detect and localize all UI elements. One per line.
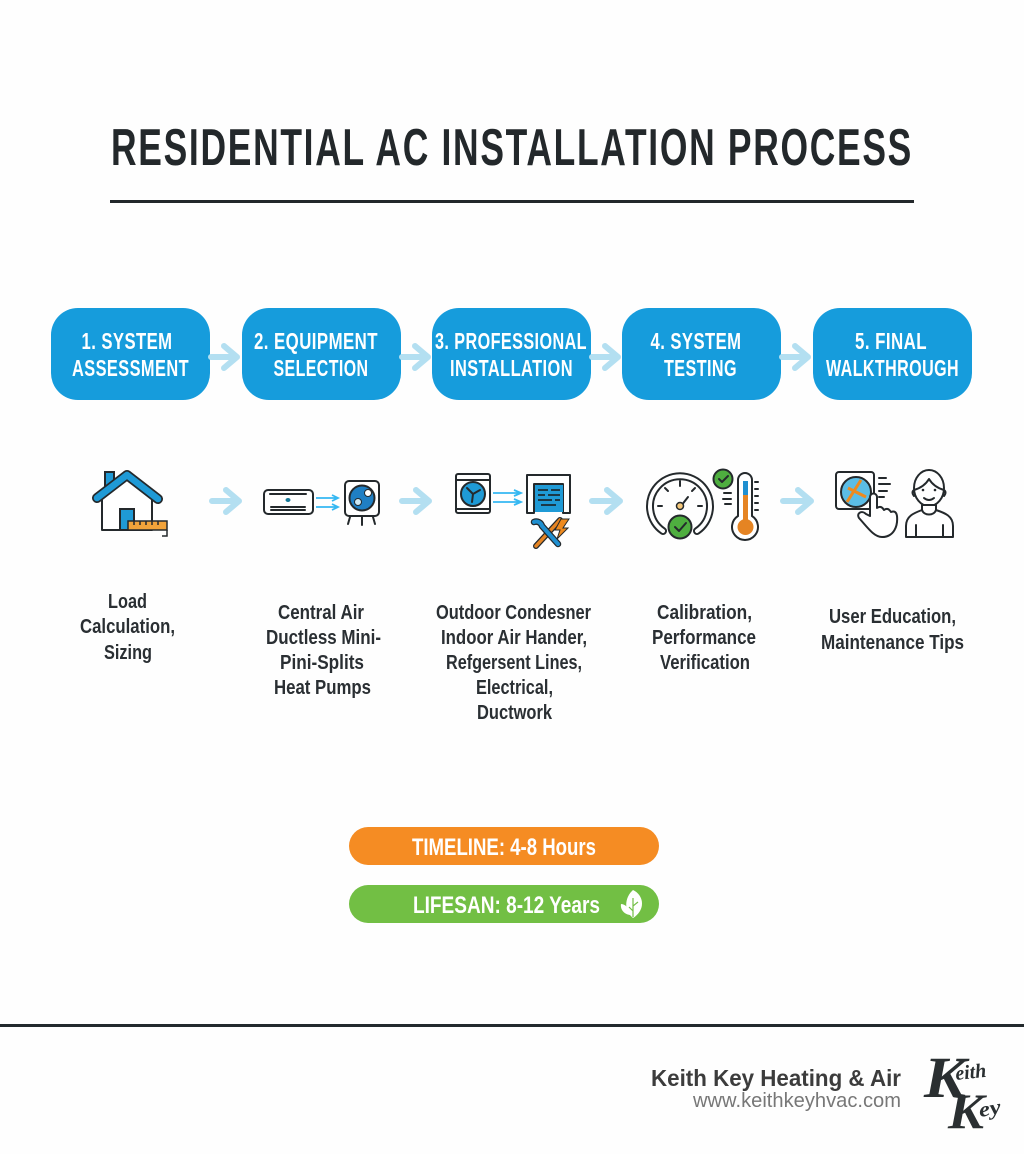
step 4 box: system testing: 4. SYSTEM xyxy=(650,328,742,354)
step 5 box: final walkthrough: WALKTHROUGH xyxy=(826,355,959,381)
step 4 box: system testing: TESTING xyxy=(664,355,737,381)
arrow: icon 2 to icon 3 xyxy=(402,490,429,512)
lifespan pill xyxy=(349,885,659,923)
step 3 box: professional installation xyxy=(432,308,591,400)
step 5 box: final walkthrough xyxy=(813,308,972,400)
text block: installation components xyxy=(436,602,591,724)
arrow: step 1 to step 2 xyxy=(211,346,237,368)
step 2 box: equipment selection: 2. EQUIPMENT xyxy=(254,328,378,354)
arrow: step 4 to step 5 xyxy=(782,346,808,368)
logo: Keith Key signature: ey xyxy=(977,1094,1003,1122)
logo: Keith Key signature: K xyxy=(923,1045,970,1110)
text block: user education xyxy=(821,606,964,654)
text block: load calculation: Sizing xyxy=(104,642,152,664)
text block: calibration and verification: Verification xyxy=(660,652,750,674)
step 5 box: final walkthrough: 5. FINAL xyxy=(855,328,927,354)
text block: calibration and verification: Calibration, xyxy=(657,602,752,624)
icon: leaf xyxy=(621,890,642,918)
text block: calibration and verification xyxy=(652,602,756,674)
text block: load calculation xyxy=(80,591,175,664)
text block: installation components: Refgersent Lines, xyxy=(446,652,582,674)
step 1 box: system assessment: ASSESSMENT xyxy=(72,355,189,381)
step 1 box: system assessment: 1. SYSTEM xyxy=(82,328,172,354)
timeline pill: TIMELINE: 4-8 Hours xyxy=(412,834,596,861)
text block: equipment options: Central Air xyxy=(278,602,364,624)
text block: installation components: Outdoor Condesner xyxy=(436,602,591,624)
text block: equipment options xyxy=(266,602,381,699)
step 3 box: professional installation: INSTALLATION xyxy=(450,355,573,381)
arrow: icon 1 to icon 2 xyxy=(212,490,239,512)
footer company name: Keith Key Heating & Air xyxy=(651,1065,901,1091)
text block: load calculation: Load xyxy=(108,591,147,613)
text block: equipment options: Heat Pumps xyxy=(274,677,371,699)
lifespan pill: LIFESAN: 8-12 Years xyxy=(413,892,600,919)
step 1 box: system assessment xyxy=(51,308,210,400)
arrow: icon 3 to icon 4 xyxy=(592,490,620,512)
text block: equipment options: Pini-Splits xyxy=(280,652,364,674)
logo: Keith Key signature: eith xyxy=(954,1060,987,1085)
text block: installation components: Ductwork xyxy=(477,702,553,724)
text block: installation components: Indoor Air Hander, xyxy=(441,627,587,649)
icon: gauge and thermometer with checks xyxy=(650,470,758,540)
text block: user education: User Education, xyxy=(829,606,956,628)
icon: indoor unit and outdoor unit xyxy=(264,481,379,525)
arrow: icon 4 to icon 5 xyxy=(783,490,811,512)
text block: calibration and verification: Performance xyxy=(652,627,756,649)
step 2 box: equipment selection: SELECTION xyxy=(274,355,368,381)
footer website: www.keithkeyhvac.com xyxy=(692,1090,901,1112)
step 2 box: equipment selection xyxy=(242,308,401,400)
logo: Keith Key signature: K xyxy=(947,1083,988,1139)
text block: load calculation: Calculation, xyxy=(80,616,175,638)
text block: equipment options: Ductless Mini- xyxy=(266,627,381,649)
icon: condenser, air handler and tools xyxy=(456,474,570,546)
step 3 box: professional installation: 3. PROFESSIONAL xyxy=(435,328,587,354)
text block: installation components: Electrical, xyxy=(476,677,553,699)
logo: Keith Key signature xyxy=(923,1045,1003,1139)
icon: house with measuring tape xyxy=(97,472,167,536)
text block: user education: Maintenance Tips xyxy=(821,632,964,654)
icon: thermostat, pointing hand and person xyxy=(836,470,953,537)
timeline pill xyxy=(349,827,659,865)
arrow: step 2 to step 3 xyxy=(402,346,428,368)
step 4 box: system testing xyxy=(622,308,781,400)
arrow: step 3 to step 4 xyxy=(592,346,618,368)
